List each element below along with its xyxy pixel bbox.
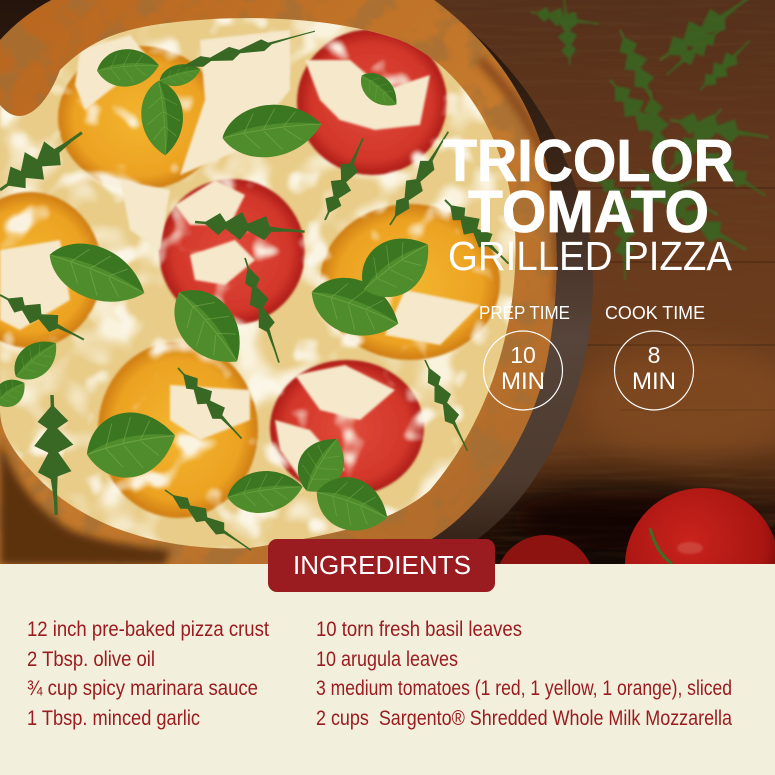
arugula leaves on pizza xyxy=(0,24,517,557)
wooden board xyxy=(0,0,593,565)
prep time: PREP TIME xyxy=(479,302,570,323)
title: TRICOLOR xyxy=(443,128,734,194)
ingredients heading: INGREDIENTS xyxy=(293,550,471,580)
ingredients right column: 10 torn fresh basil leaves xyxy=(316,617,522,641)
pizza xyxy=(0,0,600,565)
wood table background xyxy=(0,0,775,565)
prep time xyxy=(479,302,570,410)
cheese base xyxy=(0,18,516,548)
cheese with tomato slices xyxy=(0,18,516,548)
ingredients left column: 12 inch pre-baked pizza crust xyxy=(27,617,269,641)
cook time: COOK TIME xyxy=(605,302,705,323)
ingredients left column: 2 Tbsp. olive oil xyxy=(27,647,155,671)
melted mozzarella patches xyxy=(0,30,480,478)
mozzarella mottling xyxy=(0,20,516,548)
ingredients left column: ¾ cup spicy marinara sauce xyxy=(27,676,258,700)
cook time: MIN xyxy=(632,368,676,395)
basil leaves xyxy=(0,46,443,542)
ingredients panel background xyxy=(0,564,775,775)
ingredients heading xyxy=(268,539,495,592)
cook time xyxy=(605,302,705,410)
icon: whole tomatoes xyxy=(495,488,775,642)
ingredients right column: 10 arugula leaves xyxy=(316,647,458,671)
cook time: 8 xyxy=(648,342,660,368)
prep time: MIN xyxy=(501,368,545,395)
prep time: 10 xyxy=(510,342,536,368)
yellow tomato slices xyxy=(0,46,500,518)
title xyxy=(443,128,734,279)
title: TOMATO xyxy=(468,179,709,245)
ingredients right column xyxy=(316,617,732,730)
ingredients left column xyxy=(27,617,269,730)
icon: arugula on table xyxy=(528,0,772,280)
title: GRILLED PIZZA xyxy=(448,233,733,279)
red tomato slices xyxy=(159,29,447,496)
pizza crust xyxy=(0,0,600,565)
sparse mozzarella over tomatoes xyxy=(0,18,515,548)
ingredients left column: 1 Tbsp. minced garlic xyxy=(27,706,200,730)
